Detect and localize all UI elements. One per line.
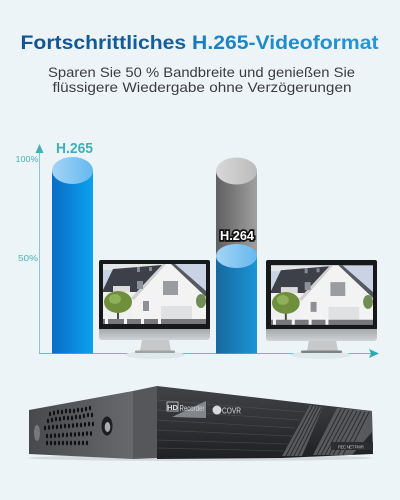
recorder front face: [157, 386, 373, 459]
logo: iCOVR: [212, 406, 241, 416]
status panel: REC NET PWR: [338, 444, 365, 450]
label: H.264: H.264: [220, 228, 255, 243]
subtitle text: flüssigere Wiedergabe ohne Verzögerungen: [52, 80, 352, 95]
title: Fortschrittliches H.265-Videoformat: [20, 32, 379, 54]
subtitle text: Sparen Sie 50 % Bandbreite und genießen Sie: [48, 65, 355, 80]
vent holes: [44, 406, 94, 445]
bar: H.264 gray portion: [216, 158, 257, 261]
subtitle text: [48, 65, 355, 95]
device: video recorder: [28, 386, 373, 461]
power connector: [102, 416, 112, 436]
axis label: 50%: 50%: [18, 254, 38, 263]
badge: HD Recorder: Recorder: [180, 404, 205, 413]
bar: H.264 50% blue portion: [216, 244, 257, 354]
chart axes: [36, 144, 379, 358]
label: H.265: H.265: [56, 140, 93, 157]
axis label: 100%: 100%: [16, 155, 38, 164]
bar: H.265 100%: [52, 157, 93, 354]
logo: iCOVR: COVR: [222, 406, 241, 416]
recorder side face: [29, 391, 133, 459]
recorder corner face: [133, 386, 157, 459]
badge: HD Recorder: HD: [167, 403, 178, 412]
status panel: [331, 442, 373, 450]
side port: [34, 425, 40, 441]
front brushed stripes: [157, 400, 305, 451]
badge: HD Recorder: [167, 401, 206, 418]
monitor: H.265: [99, 260, 210, 359]
diagonal vent bands: [282, 405, 372, 456]
monitor: H.264: [266, 260, 377, 359]
diagonal vent lines: [286, 405, 369, 456]
